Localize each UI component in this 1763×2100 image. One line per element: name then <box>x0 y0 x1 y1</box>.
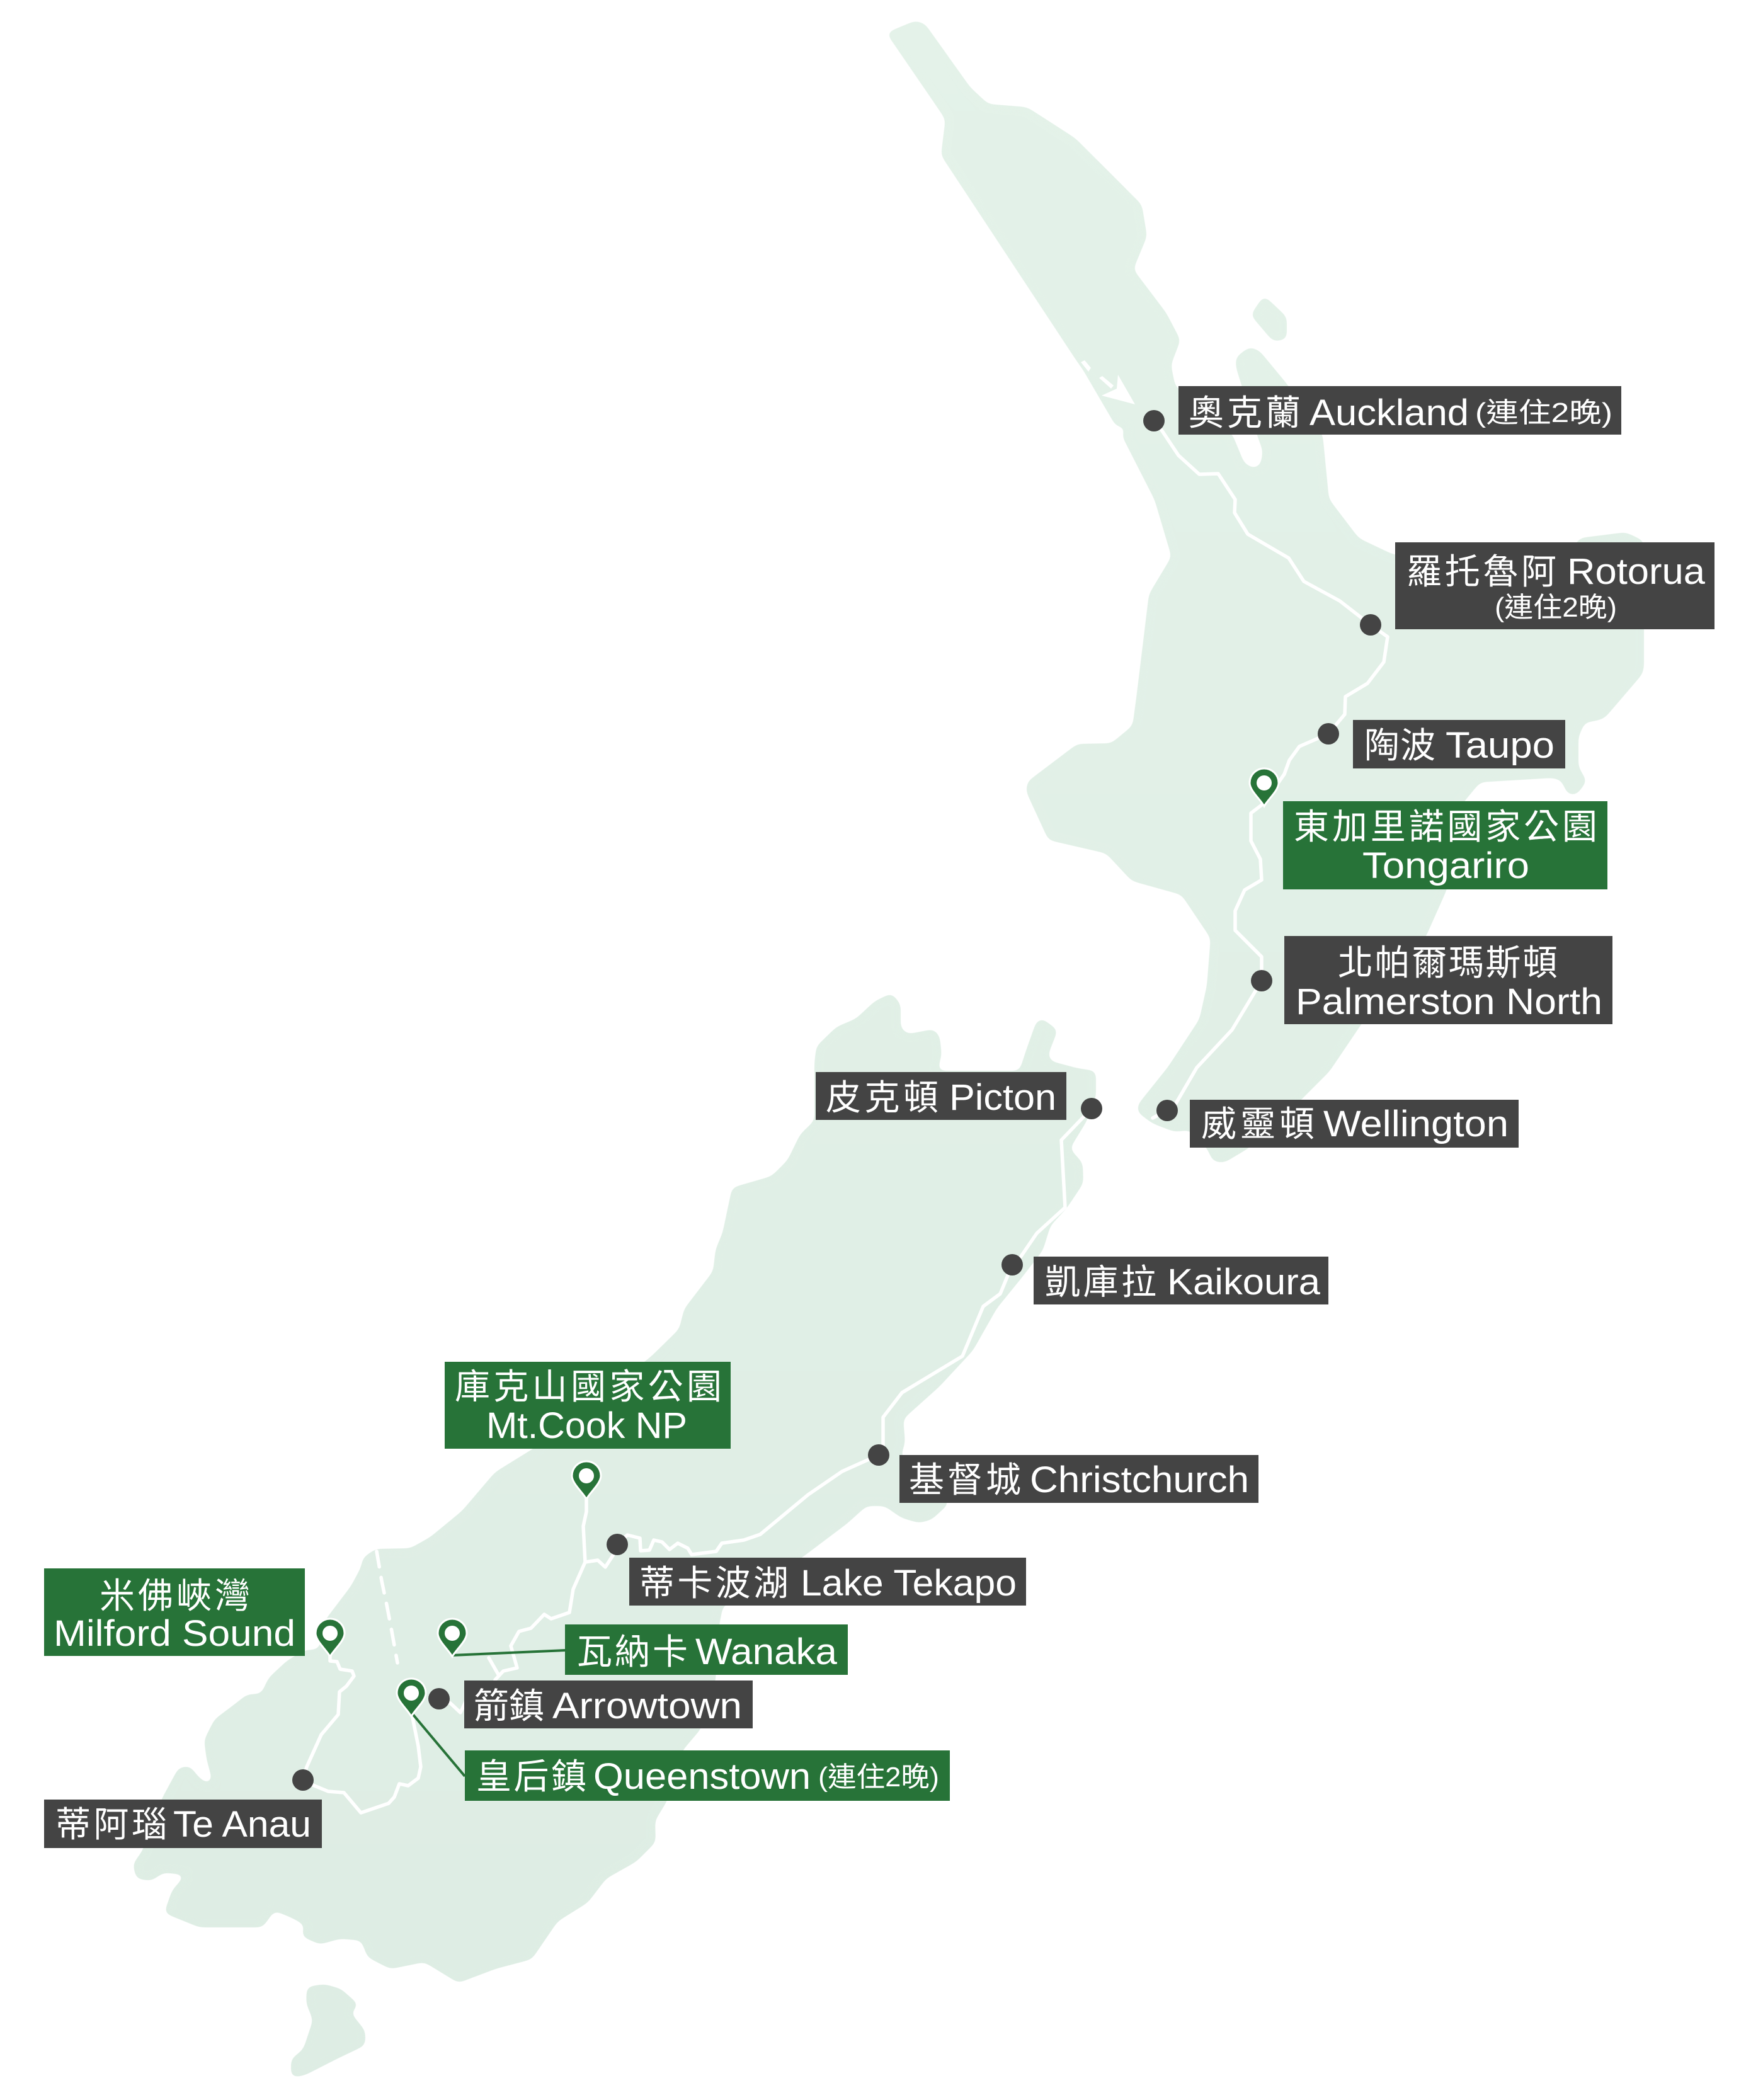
label: Wanaka: 瓦納卡 <box>577 1632 688 1672</box>
label: Queenstown: (連住2晚) <box>818 1762 939 1793</box>
label: Auckland: Auckland <box>1309 392 1469 433</box>
label: Kaikoura <box>1034 1257 1328 1304</box>
label: Wellington: 威靈頓 <box>1201 1104 1315 1144</box>
label: Taupo: 陶波 <box>1364 726 1435 765</box>
landmass: Stewart Island <box>292 1985 364 2076</box>
label: Queenstown: Queenstown <box>593 1756 811 1797</box>
label: Tongariro: 東加里諾國家公園 <box>1294 807 1597 847</box>
label: Lake Tekapo <box>629 1558 1026 1606</box>
label: Te Anau: 蒂阿瑙 <box>55 1805 167 1844</box>
label: Christchurch <box>899 1455 1258 1503</box>
connector: Queenstown <box>412 1713 465 1776</box>
label: Christchurch: 基督城 <box>909 1460 1021 1500</box>
pin: Mt Cook <box>572 1461 601 1499</box>
label: Lake Tekapo: Lake Tekapo <box>801 1563 1017 1604</box>
label: Wanaka <box>565 1624 848 1675</box>
label: Kaikoura: 凱庫拉 <box>1045 1262 1156 1302</box>
label: Queenstown: 皇后鎮 <box>476 1757 586 1796</box>
label: Auckland: (連住2晚) <box>1475 397 1612 428</box>
label: Rotorua: 羅托魯阿 <box>1406 552 1556 591</box>
label: Mt Cook <box>445 1362 731 1449</box>
stop: Arrowtown dot <box>428 1688 450 1709</box>
landmass: North Island <box>888 22 1643 1161</box>
label: Arrowtown <box>464 1681 753 1728</box>
label: Milford Sound: 米佛峽灣 <box>100 1576 250 1616</box>
pin: Wanaka <box>438 1619 467 1657</box>
label: Palmerston North: Palmerston North <box>1296 981 1602 1022</box>
label: Kaikoura: Kaikoura <box>1167 1262 1321 1303</box>
label: Picton: Picton <box>949 1077 1056 1118</box>
label: Auckland: 奧克蘭 <box>1189 393 1301 433</box>
label: Arrowtown: Arrowtown <box>552 1686 742 1726</box>
label: Rotorua <box>1395 542 1715 629</box>
label: Christchurch: Christchurch <box>1030 1459 1249 1500</box>
stop: Lake Tekapo dot <box>607 1534 628 1555</box>
label: Te Anau: Te Anau <box>173 1804 311 1845</box>
route: Wanaka branch road <box>489 1658 499 1675</box>
label: Palmerston North: 北帕爾瑪斯頓 <box>1338 943 1558 983</box>
route: Mt Cook to Arrowtown road <box>495 1494 586 1680</box>
stop: Wellington dot <box>1156 1100 1178 1121</box>
stop: Picton dot <box>1081 1098 1102 1119</box>
label: Tongariro: Tongariro <box>1362 845 1529 886</box>
route: dashed Milford track <box>377 1551 397 1663</box>
route: North Island road <box>1153 421 1388 1118</box>
route: Milford, Te Anau and Queenstown road <box>303 1655 421 1813</box>
label: Wellington <box>1190 1100 1519 1148</box>
stop: Kaikoura dot <box>1001 1254 1023 1275</box>
stop: Te Anau dot <box>292 1769 314 1791</box>
label: Tongariro <box>1283 801 1607 889</box>
label: Mt Cook: Mt.Cook NP <box>486 1405 687 1446</box>
route: South Island east coast road <box>585 1109 1092 1567</box>
connector: Wanaka <box>452 1650 566 1655</box>
label: Milford Sound: Milford Sound <box>54 1613 295 1654</box>
label: Auckland <box>1178 386 1621 435</box>
label: Taupo: Taupo <box>1446 725 1555 766</box>
route: Arrowtown road <box>439 1699 466 1713</box>
stop: Taupo dot <box>1318 723 1339 745</box>
label: Te Anau <box>44 1800 322 1848</box>
label: Milford Sound <box>44 1568 305 1656</box>
label: Wanaka: Wanaka <box>695 1631 838 1672</box>
landmass: Great Barrier Island <box>1252 297 1286 340</box>
label: Picton <box>816 1072 1066 1120</box>
stop: Palmerston North dot <box>1251 970 1272 991</box>
pin: Tongariro <box>1250 768 1279 806</box>
label: Mt Cook: 庫克山國家公園 <box>455 1367 722 1407</box>
label: Palmerston North <box>1284 936 1612 1024</box>
label: Rotorua: (連住2晚) <box>1495 592 1617 623</box>
harbour cut-outs near Auckland <box>1081 360 1135 404</box>
label: Rotorua: Rotorua <box>1567 551 1706 592</box>
label: Taupo <box>1353 720 1565 768</box>
label: Arrowtown: 箭鎮 <box>474 1686 544 1726</box>
label: Wellington: Wellington <box>1323 1104 1509 1144</box>
landmass: South Island <box>134 995 1095 1982</box>
stop: Rotorua dot <box>1360 614 1381 636</box>
label: Queenstown <box>465 1750 950 1801</box>
label: Lake Tekapo: 蒂卡波湖 <box>639 1563 789 1603</box>
stop: Christchurch dot <box>868 1444 889 1466</box>
pin: Milford Sound <box>316 1619 345 1657</box>
pin: Queenstown <box>397 1679 426 1716</box>
stop: Auckland dot <box>1143 410 1165 431</box>
label: Picton: 皮克頓 <box>826 1078 939 1117</box>
